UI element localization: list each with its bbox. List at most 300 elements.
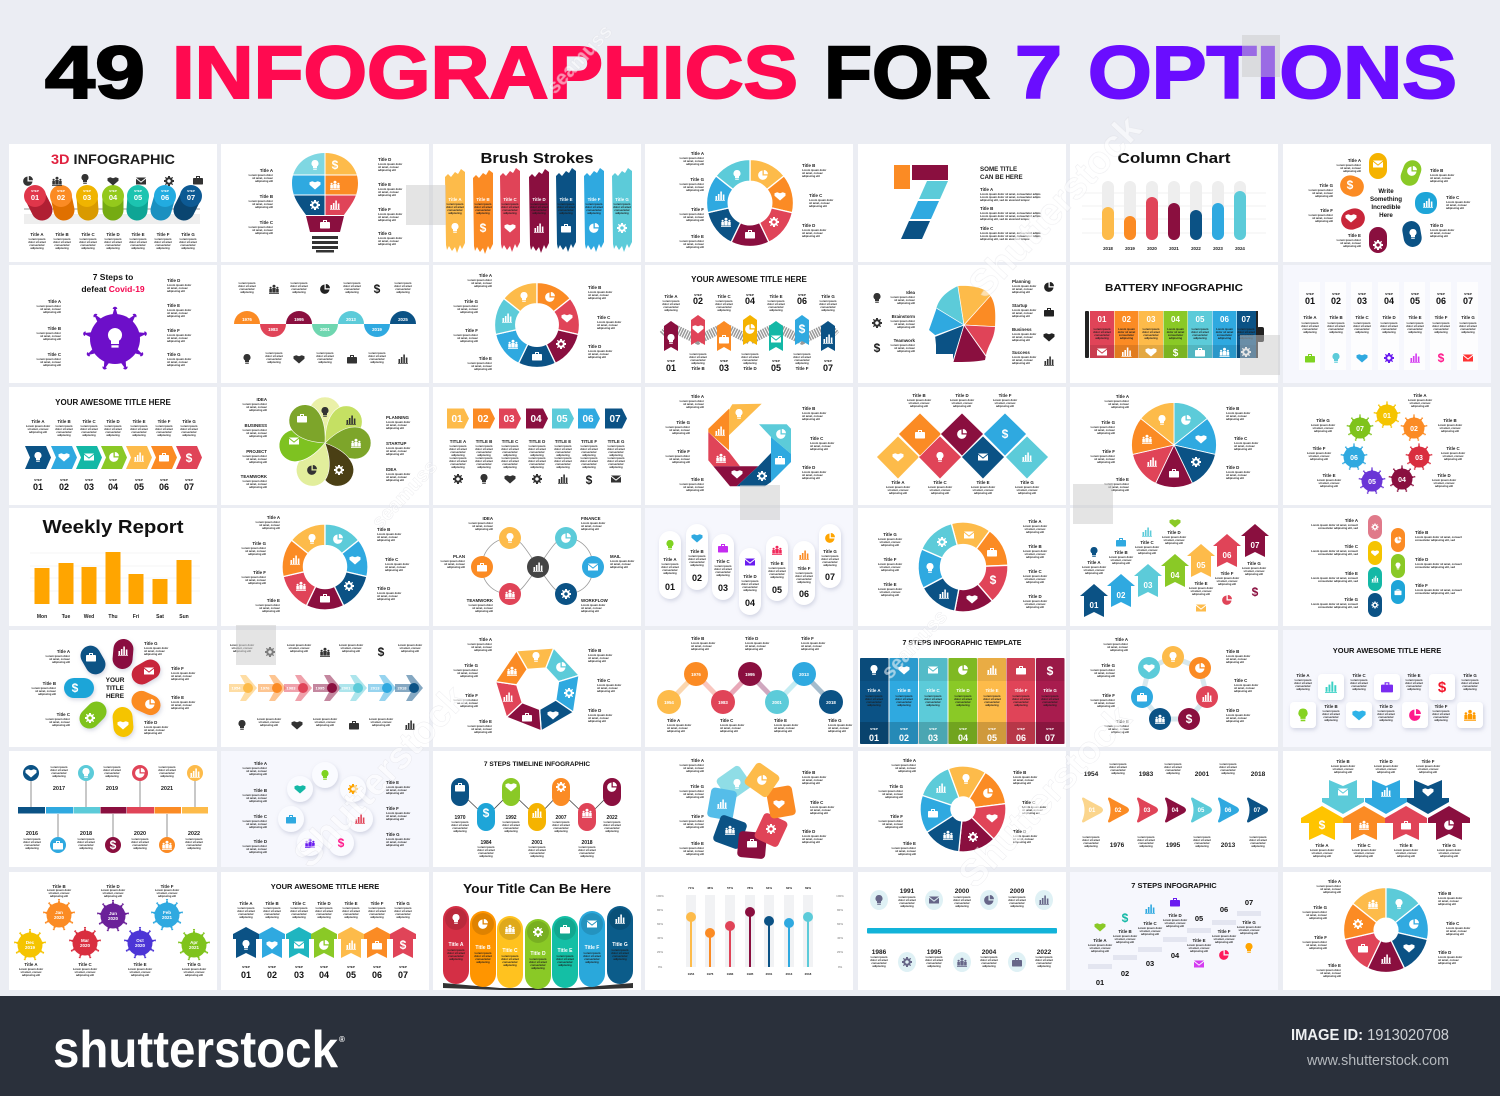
captions: Title E <box>131 232 145 237</box>
arrows: 1983 <box>287 686 296 690</box>
columns: 03 <box>1357 296 1367 306</box>
step numbers: STEP <box>34 478 42 482</box>
zigzag circles: 1976 <box>691 672 701 677</box>
columns: STEP <box>1306 292 1314 296</box>
captions: Title E <box>167 303 180 308</box>
arrows: 02 <box>1117 591 1126 600</box>
panel: radial capsules <box>9 630 217 747</box>
captions <box>242 515 409 613</box>
brush columns: Title C <box>503 197 517 202</box>
captions: Title G <box>1020 480 1034 485</box>
arrows: 1976 <box>261 686 270 690</box>
captions: Title A <box>691 758 705 763</box>
columns: STEP <box>988 727 996 731</box>
arrows: $ <box>1319 818 1326 832</box>
cards: Title D <box>530 951 546 957</box>
panel: pin timeline <box>9 751 217 867</box>
columns: STEP <box>1385 292 1393 296</box>
captions: Title D <box>1379 704 1393 709</box>
lollipop chart: 40% <box>837 936 843 940</box>
captions: Title F <box>1435 704 1448 709</box>
capsule row: 07 <box>187 193 195 202</box>
columns: Title A <box>1303 315 1317 320</box>
captions: Title G <box>182 419 196 424</box>
capsules: Title C <box>716 559 730 564</box>
captions: Title G <box>187 962 201 967</box>
years: 1995 <box>1166 842 1181 849</box>
text block: CAN BE HERE <box>980 174 1023 181</box>
captions: Title F <box>1314 935 1327 940</box>
wave: 2013 <box>346 317 356 322</box>
text block <box>980 166 1041 241</box>
captions: Title F <box>161 884 174 889</box>
captions: IDEA <box>386 467 397 472</box>
captions: Title B <box>57 419 71 424</box>
lollipop chart: 100% <box>656 894 664 898</box>
captions: TITLE E <box>555 439 571 444</box>
icons and captions: Title B <box>1114 550 1128 555</box>
captions: Title D <box>1430 223 1443 228</box>
capsules: 02 <box>692 573 702 583</box>
heading <box>81 272 145 294</box>
captions: Title A <box>1116 394 1130 399</box>
captions: Title A <box>1348 158 1362 163</box>
bulb chart <box>290 150 360 252</box>
viruses: 03 <box>1415 455 1423 462</box>
panel: steps timeline <box>433 751 641 867</box>
columns: Title B <box>897 688 911 693</box>
capsules: Title B <box>690 549 704 554</box>
arrows: 2013 <box>371 686 380 690</box>
captions: Title D <box>1226 465 1239 470</box>
icons: $ <box>586 473 593 487</box>
columns: Title D <box>956 688 970 693</box>
panel: arrow ring <box>858 508 1066 626</box>
cards: Title C <box>502 948 518 954</box>
years: 2004 <box>982 949 997 956</box>
viruses: 2019 <box>25 945 36 950</box>
arrows: 04 <box>1171 571 1180 580</box>
watermark <box>236 21 1280 896</box>
capsule row: STEP <box>187 189 195 193</box>
right list: Startup <box>1012 303 1028 308</box>
columns <box>1299 282 1478 370</box>
panel: arched cards <box>433 872 641 990</box>
captions: Title G <box>676 420 691 425</box>
captions: Title E <box>479 356 492 361</box>
captions: Title B <box>43 681 56 686</box>
tiles: $ <box>1438 679 1447 696</box>
panel: blue line timeline <box>858 872 1066 990</box>
viruses: Apr <box>190 940 198 945</box>
captions: Title B <box>912 393 926 398</box>
icons <box>870 890 1053 972</box>
years: 2001 <box>1195 771 1210 778</box>
bar chart: Fri <box>133 614 140 620</box>
columns: 05 <box>987 733 997 743</box>
captions: Title D <box>1438 950 1451 955</box>
lollipop chart: 1995 <box>747 972 754 976</box>
battery <box>1085 311 1264 359</box>
heading: Weekly Report <box>42 517 184 537</box>
capsules: Title D <box>743 574 757 579</box>
chevrons <box>25 446 202 469</box>
arrows: 2001 <box>342 686 351 690</box>
captions: Title A <box>691 151 705 156</box>
columns: Title C <box>1355 315 1369 320</box>
panel: brush strokes <box>433 144 641 262</box>
battery: 03 <box>1147 315 1156 324</box>
captions: 01 <box>666 363 676 373</box>
captions: Title G <box>889 784 904 789</box>
captions: Title C <box>933 480 947 485</box>
panel: rounded triangles ring <box>645 751 853 867</box>
cards: Title A <box>448 942 464 948</box>
years: 1991 <box>900 888 915 895</box>
years and captions: 2022 <box>188 831 200 837</box>
captions: STEP <box>772 359 780 363</box>
captions: MAIL <box>610 554 621 559</box>
panel: virus ring <box>1283 387 1491 505</box>
tags: 04 <box>530 414 542 425</box>
captions: WORKFLOW <box>581 598 609 603</box>
lollipop chart: 60% <box>657 922 663 926</box>
captions: Title G <box>1101 420 1116 425</box>
captions: TITLE C <box>502 439 519 444</box>
captions: Title D <box>588 344 601 349</box>
captions: Title D <box>106 419 120 424</box>
captions: 06 <box>797 296 807 306</box>
centre text: Something <box>1370 196 1402 203</box>
heading: YOUR AWESOME TITLE HERE <box>271 882 379 891</box>
captions: Title F <box>253 570 266 575</box>
title: FOR <box>824 31 990 114</box>
captions: Title C <box>717 294 731 299</box>
columns: Title A <box>867 688 881 693</box>
steps: Title F <box>1218 929 1231 934</box>
shutter chart <box>909 757 1014 863</box>
watermark: Shutterstock <box>951 697 1141 896</box>
centre text: Incredible <box>1371 204 1401 211</box>
columns: STEP <box>929 727 937 731</box>
title: 49 <box>45 31 145 114</box>
captions: Title B <box>254 788 267 793</box>
capsules: Title A <box>663 557 677 562</box>
ribbons: $ <box>799 322 806 336</box>
captions: STEP <box>824 359 832 363</box>
top row <box>238 281 412 296</box>
captions: Title D <box>1028 594 1042 599</box>
capsule row: 04 <box>109 193 118 202</box>
panel: shutter pie <box>858 751 1066 867</box>
steps: 05 <box>346 970 356 980</box>
captions: PLAN <box>453 554 465 559</box>
captions: Title G <box>396 901 410 906</box>
capsule ring: $ <box>1347 178 1354 192</box>
captions: Title C <box>1352 673 1366 678</box>
steps: 01 <box>1096 978 1104 987</box>
captions: STARTUP <box>386 441 406 446</box>
years: 1954 <box>1084 771 1099 778</box>
captions: TEAMWORK <box>241 474 268 479</box>
steps: Title A <box>1093 938 1107 943</box>
captions: Title E <box>774 718 787 723</box>
steps: 02 <box>267 970 277 980</box>
years: 1992 <box>505 815 517 821</box>
diamond chart <box>876 413 1048 479</box>
captions <box>1311 518 1462 609</box>
captions: Title C <box>1022 800 1036 805</box>
arrows <box>1080 524 1269 617</box>
captions: Title C <box>292 901 306 906</box>
panel: rising arrows <box>1070 508 1278 626</box>
arrows: 1954 <box>232 686 241 690</box>
captions: Title F <box>796 366 809 371</box>
captions: Title A <box>24 962 38 967</box>
capsules: Title G <box>823 549 837 554</box>
brush columns: Title B <box>476 197 490 202</box>
years and captions: 2019 <box>106 786 118 792</box>
arrows: 1995 <box>316 686 325 690</box>
captions <box>680 151 833 249</box>
cards <box>443 906 633 990</box>
capsule row: 02 <box>57 193 65 202</box>
columns: Title F <box>1435 315 1448 320</box>
panel: infinity loop <box>433 508 641 626</box>
arrows: $ <box>400 938 407 952</box>
panel: tag columns <box>433 387 641 505</box>
panel: chevron steps <box>9 387 217 505</box>
panel: colored arrows row <box>221 872 429 990</box>
captions: Title C <box>57 712 71 717</box>
captions: TITLE G <box>608 439 625 444</box>
captions: Title G <box>1313 905 1328 910</box>
years and captions: 2020 <box>134 831 146 837</box>
captions: Title E <box>1399 843 1413 848</box>
arrows: 06 <box>1223 551 1232 560</box>
captions: Title F <box>465 693 478 698</box>
captions: Title E <box>1116 719 1129 724</box>
text block: Title B <box>980 206 993 211</box>
cards: Title F <box>585 945 599 951</box>
captions: Title D <box>802 465 815 470</box>
column chart: 2019 <box>1125 246 1135 251</box>
triangles: 05 <box>1198 808 1205 814</box>
step numbers: 07 <box>184 482 194 492</box>
steps: Title D <box>1168 913 1182 918</box>
top row: $ <box>378 645 385 659</box>
watermark: seamuss <box>543 21 617 98</box>
captions: Title E <box>1407 673 1421 678</box>
captions <box>28 232 197 250</box>
image id: IMAGE ID: 1913020708 <box>1291 1027 1449 1044</box>
timeline bar <box>18 807 208 814</box>
columns: 02 <box>899 733 909 743</box>
captions: STEP <box>694 293 702 297</box>
captions: Title A <box>1345 518 1359 523</box>
captions: Title B <box>588 648 601 653</box>
columns: $ <box>1438 351 1445 365</box>
panel: circle ring <box>1070 630 1278 747</box>
triangles: 07 <box>1254 808 1261 814</box>
steps: 03 <box>1146 959 1154 968</box>
viruses: 04 <box>1398 477 1406 484</box>
captions: Title D <box>167 278 180 283</box>
years and captions: 2021 <box>161 786 173 792</box>
column chart: 2020 <box>1147 246 1157 251</box>
columns: STEP <box>1046 727 1054 731</box>
brush columns: Title G <box>615 197 629 202</box>
heading: 3D INFOGRAPHIC <box>51 151 175 167</box>
panel: ring arrows <box>645 144 853 262</box>
years and captions: 2017 <box>53 786 65 792</box>
captions: Title F <box>890 814 903 819</box>
panel: steps template <box>858 630 1066 747</box>
lollipop chart: 46% <box>707 886 713 890</box>
centre text: Here <box>1379 212 1393 219</box>
lollipop chart: 57% <box>727 886 733 890</box>
captions: TITLE A <box>450 439 467 444</box>
capsules: Title F <box>798 566 811 571</box>
lollipop chart: 1983 <box>727 972 734 976</box>
years: 2022 <box>1037 949 1052 956</box>
tags: 01 <box>451 414 463 425</box>
left list: Idea <box>906 290 916 295</box>
lollipop chart: 20% <box>837 950 843 954</box>
viruses: 01 <box>1383 413 1391 420</box>
captions <box>26 419 198 437</box>
wave: 1995 <box>294 317 304 322</box>
viruses <box>1340 401 1433 494</box>
captions: TITLE D <box>529 439 545 444</box>
captions: Title D <box>802 223 815 228</box>
captions: Title B <box>691 366 705 371</box>
step numbers: 04 <box>108 482 118 492</box>
step numbers: STEP <box>135 478 143 482</box>
captions: 02 <box>693 296 703 306</box>
captions <box>1294 673 1479 722</box>
captions: Title E <box>903 841 916 846</box>
title: 7 <box>1015 31 1062 114</box>
captions: Title C <box>385 557 399 562</box>
step numbers: STEP <box>60 478 68 482</box>
tags <box>447 408 627 428</box>
columns: STEP <box>1358 292 1366 296</box>
viruses: Jan <box>55 910 63 915</box>
years <box>1082 762 1267 849</box>
lollipop chart: 0% <box>658 965 662 969</box>
captions: Title F <box>167 328 180 333</box>
lollipop chart: 62% <box>786 886 792 890</box>
wave: 2001 <box>320 327 330 332</box>
heading: 7 STEPS INFOGRAPHIC TEMPLATE <box>903 640 1022 647</box>
captions: Title B <box>1430 168 1443 173</box>
captions: Title D <box>106 232 120 237</box>
captions: Title E <box>133 962 147 967</box>
icons and captions: Title D <box>1167 530 1181 535</box>
captions: Title D <box>106 884 120 889</box>
columns: 05 <box>1410 296 1420 306</box>
columns: Title B <box>1329 315 1343 320</box>
steps <box>1088 898 1261 987</box>
panel: folded octagon <box>645 387 853 505</box>
captions: Title D <box>743 366 757 371</box>
captions: Title E <box>378 182 391 187</box>
captions: Title B <box>802 406 815 411</box>
tags: 07 <box>609 414 621 425</box>
bar chart: Tue <box>62 614 70 620</box>
captions: Title E <box>883 582 897 587</box>
capsule row: STEP <box>161 189 169 193</box>
captions: Title G <box>690 784 705 789</box>
captions: Title G <box>144 641 158 646</box>
captions: STEP <box>667 359 675 363</box>
captions: Title C <box>1446 195 1460 200</box>
image id <box>1291 1027 1449 1069</box>
captions: STEP <box>720 359 728 363</box>
captions: 07 <box>823 363 833 373</box>
captions: Title E <box>132 419 146 424</box>
capsules: Title E <box>770 561 784 566</box>
years: 2018 <box>1251 771 1266 778</box>
heading: YOUR AWESOME TITLE HERE <box>55 398 172 407</box>
captions: Title C <box>1345 544 1359 549</box>
icons and captions <box>1082 519 1266 612</box>
captions: Title D <box>144 720 157 725</box>
captions: Title G <box>1319 183 1334 188</box>
text block: SOME TITLE <box>980 166 1017 173</box>
years: 1995 <box>927 949 942 956</box>
centre text: Write <box>1378 188 1394 195</box>
panel: wave timeline <box>221 265 429 383</box>
viruses: 2020 <box>80 943 91 948</box>
columns: 01 <box>1305 296 1315 306</box>
captions: Title C <box>48 352 62 357</box>
panel: swirl ring <box>1283 872 1491 990</box>
capsule row: STEP <box>134 189 142 193</box>
ring chart: $ <box>990 573 997 587</box>
captions: Title B <box>1443 418 1457 423</box>
captions: Title C <box>82 419 96 424</box>
years and captions <box>23 765 203 850</box>
capsules <box>1368 515 1405 617</box>
captions: Title D <box>254 839 267 844</box>
captions: Title G <box>252 541 267 546</box>
captions: Title F <box>158 419 171 424</box>
years and captions: 2016 <box>26 831 38 837</box>
captions: Title E <box>1345 571 1358 576</box>
captions <box>454 273 621 371</box>
column chart: 2024 <box>1235 246 1245 251</box>
zigzag circles: 2001 <box>772 700 782 705</box>
captions: Title A <box>57 649 71 654</box>
cards: Title E <box>558 948 573 954</box>
captions: Title A <box>30 232 44 237</box>
lollipop chart: 78% <box>747 886 753 890</box>
captions: Title B <box>802 770 815 775</box>
lollipop chart: 2018 <box>805 972 812 976</box>
columns: STEP <box>959 727 967 731</box>
tags: 06 <box>582 414 594 425</box>
right list: Planning <box>1012 279 1031 284</box>
captions: Title B <box>1028 544 1042 549</box>
captions: Title B <box>1226 406 1239 411</box>
captions: Title E <box>1328 963 1341 968</box>
captions: Title C <box>78 962 92 967</box>
capsules: 05 <box>772 585 782 595</box>
panel: column chart <box>1070 144 1278 262</box>
arrows <box>1301 780 1470 840</box>
